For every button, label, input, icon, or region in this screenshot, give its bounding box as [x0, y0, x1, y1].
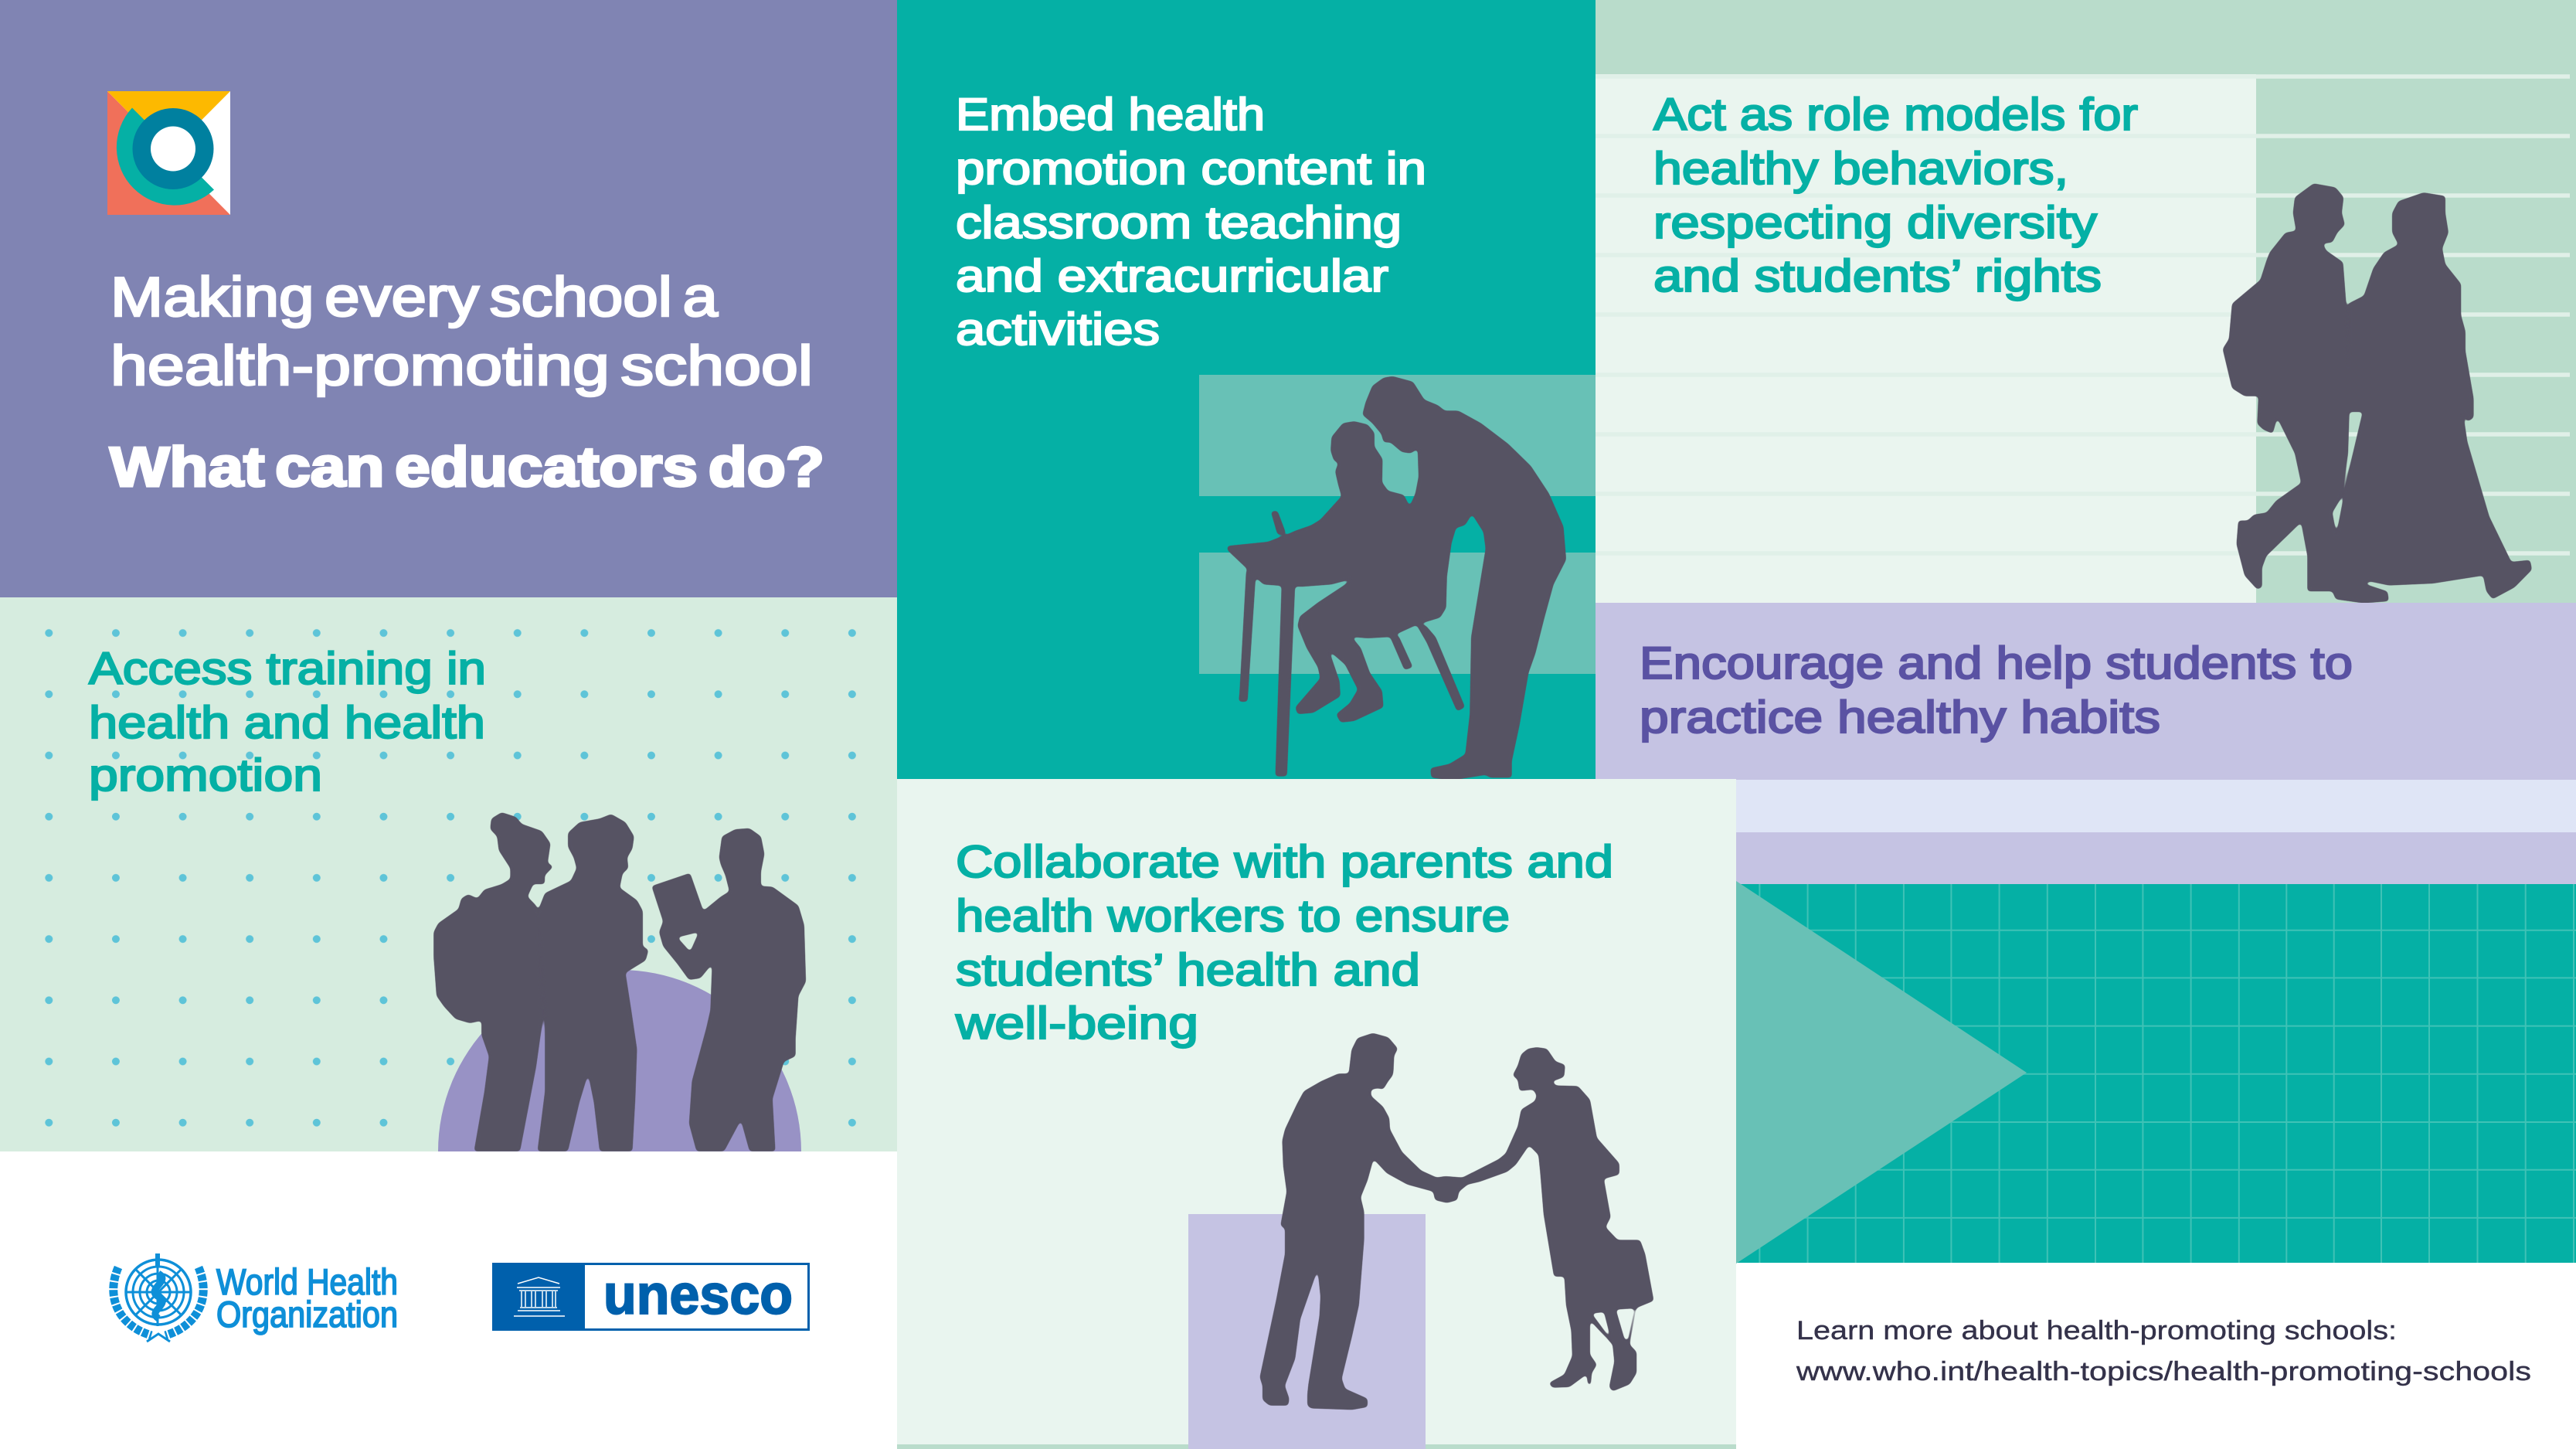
text: embed health promotion: and extracurricular	[956, 251, 1388, 301]
icon: school logo	[107, 91, 230, 215]
heading	[110, 267, 813, 397]
text: embed health promotion: promotion content in	[956, 144, 1426, 194]
silhouette: two people walking	[2223, 183, 2532, 604]
panel: title	[0, 0, 897, 597]
semicircle backdrop	[438, 970, 801, 1151]
text: learn more: Learn more about health-promoting schools:	[1796, 1316, 2397, 1345]
text: collaborate: well-being	[955, 998, 1198, 1049]
panel: decorative arrow block	[1736, 780, 2576, 1264]
text: role models: healthy behaviors,	[1653, 144, 2068, 194]
text: embed health promotion: classroom teaching	[956, 198, 1402, 248]
text: unesco: unesco	[603, 1264, 793, 1326]
heading: Making every school a	[110, 267, 719, 328]
text: learn more: www.who.int/health-topics/health-promoting-schools	[1796, 1357, 2531, 1386]
silhouette: handshake	[1259, 1033, 1654, 1410]
text: embed health promotion: activities	[956, 304, 1160, 355]
text: role models: Act as role models for	[1653, 90, 2138, 140]
panel: role models	[1596, 0, 2576, 604]
text: WHO wordmark: World Health	[216, 1261, 398, 1302]
heading: health-promoting school	[110, 335, 813, 397]
logo: UNESCO	[492, 1263, 808, 1331]
text: access training: health and health	[89, 698, 485, 748]
text: learn more	[1796, 1316, 2531, 1386]
arrow: triangle	[1736, 881, 2027, 1264]
text: collaborate: Collaborate with parents and	[956, 837, 1613, 887]
text: embed health promotion	[956, 90, 1426, 355]
panel: access training	[0, 597, 897, 1151]
text: encourage healthy habits	[1640, 638, 2353, 743]
silhouette: teacher and student	[1227, 376, 1566, 781]
silhouette: three students	[433, 812, 806, 1151]
text: access training: Access training in	[89, 644, 486, 694]
text: WHO wordmark	[216, 1261, 398, 1335]
text: access training	[89, 644, 486, 801]
panel: embed health promotion	[897, 0, 1596, 781]
text: embed health promotion: Embed health	[956, 90, 1265, 140]
text: role models: respecting diversity	[1653, 198, 2097, 248]
icon: temple	[514, 1277, 565, 1316]
text: WHO wordmark: Organization	[216, 1294, 398, 1335]
panel: collaborate	[897, 779, 1736, 1449]
text: collaborate	[955, 837, 1613, 1049]
panel: partner logos	[0, 1151, 897, 1449]
text: encourage healthy habits: Encourage and help students to	[1640, 638, 2353, 689]
text: encourage healthy habits: practice healthy habits	[1640, 692, 2160, 743]
icon: WHO emblem	[114, 1253, 203, 1342]
text: collaborate: students’ health and	[956, 945, 1420, 995]
panel: encourage healthy habits	[1596, 603, 2576, 780]
logo: World Health Organization	[114, 1253, 398, 1342]
subheading: What can educators do?	[110, 437, 824, 498]
text: role models	[1653, 90, 2138, 301]
text: access training: promotion	[89, 750, 322, 801]
text: role models: and students’ rights	[1653, 251, 2102, 301]
text: collaborate: health workers to ensure	[956, 891, 1510, 941]
